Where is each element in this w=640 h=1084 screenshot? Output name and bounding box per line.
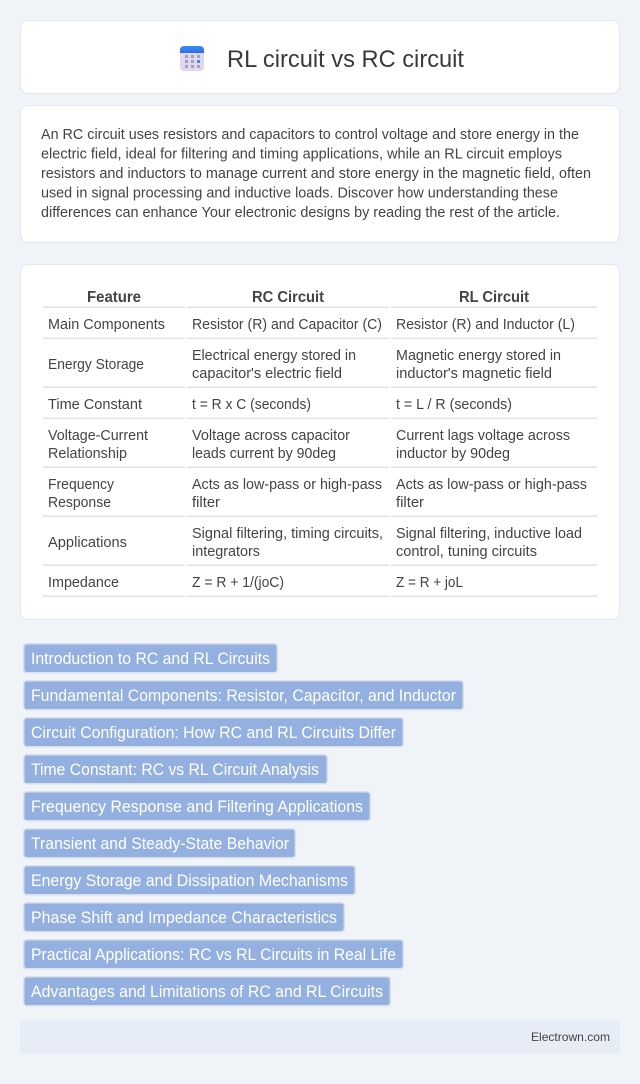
row: voltage-current relationship: Voltage across capacitor — [192, 428, 350, 444]
panel: title header — [20, 20, 620, 94]
link: introduction: Introduction to RC and RL Circuits — [31, 649, 270, 668]
row: energy storage — [48, 348, 561, 382]
link: transient behavior: Transient and Steady-State Behavior — [31, 834, 289, 853]
link: frequency response: Frequency Response and Filtering Applications — [31, 797, 363, 816]
row: voltage-current relationship: Relationship — [48, 446, 127, 462]
row: applications: Applications — [48, 535, 127, 551]
table header row: RL Circuit — [459, 289, 530, 306]
row: time constant: t = R x C (seconds) — [192, 397, 311, 413]
link: energy storage — [24, 866, 355, 895]
row: main components: Main Components — [48, 317, 165, 333]
text block: introduction paragraph: An RC circuit uses resistors and capacitors to control voltage and store energy in the — [41, 127, 579, 143]
text block: introduction paragraph: resistors and inductors to manage current and store energy in the magnetic field, often — [41, 166, 591, 182]
row: main components: Resistor (R) and Inductor (L) — [396, 317, 575, 333]
row: impedance: Z = R + joL — [396, 575, 463, 591]
link: introduction — [24, 644, 277, 673]
row: energy storage: Electrical energy stored in — [192, 348, 356, 364]
table header row: RC Circuit — [252, 289, 325, 306]
row: voltage-current relationship: Voltage-Current — [48, 428, 148, 444]
row: time constant — [48, 397, 512, 413]
row: impedance: Impedance — [48, 575, 119, 591]
row: impedance: Z = R + 1/(joC) — [192, 575, 284, 591]
row: energy storage: capacitor's electric field — [192, 366, 342, 382]
footer — [20, 1020, 620, 1054]
row: main components — [48, 317, 575, 333]
row: time constant: Time Constant — [48, 397, 142, 413]
row: energy storage: Magnetic energy stored in — [396, 348, 561, 364]
row: energy storage: inductor's magnetic field — [396, 366, 552, 382]
row: impedance — [48, 575, 463, 591]
row: frequency response: Frequency — [48, 477, 115, 493]
link: time constant — [24, 755, 327, 784]
row: frequency response: Acts as low-pass or high-pass — [192, 477, 382, 493]
link: fundamental components: Fundamental Components: Resistor, Capacitor, and Inductor — [31, 686, 456, 705]
row: time constant: t = L / R (seconds) — [396, 397, 512, 413]
link: phase shift — [24, 903, 344, 932]
link: time constant: Time Constant: RC vs RL Circuit Analysis — [31, 760, 319, 779]
row: applications: integrators — [192, 544, 260, 560]
row: frequency response: Acts as low-pass or high-pass — [396, 477, 587, 493]
link: fundamental components — [24, 681, 463, 710]
link: circuit configuration: Circuit Configuration: How RC and RL Circuits Differ — [31, 723, 396, 742]
row: frequency response: filter — [192, 495, 220, 511]
link: advantages — [24, 977, 390, 1006]
panel: comparison table — [20, 264, 620, 620]
row: frequency response: filter — [396, 495, 424, 511]
link: transient behavior — [24, 829, 295, 858]
row: voltage-current relationship: inductor by 90deg — [396, 446, 510, 462]
link: practical applications — [24, 940, 403, 969]
row: frequency response: Response — [48, 495, 111, 511]
row: applications — [48, 526, 582, 560]
link: energy storage: Energy Storage and Dissipation Mechanisms — [31, 871, 348, 890]
link: circuit configuration — [24, 718, 403, 747]
link: frequency response — [24, 792, 370, 821]
link: advantages: Advantages and Limitations of RC and RL Circuits — [31, 982, 383, 1001]
table of contents links — [24, 644, 463, 1006]
table header row — [87, 289, 530, 306]
row: applications: Signal filtering, inductive load — [396, 526, 582, 542]
text block: introduction paragraph: differences can enhance Your electronic designs by reading the rest of the article. — [41, 205, 560, 221]
row: frequency response — [48, 477, 587, 511]
table header row: Feature — [87, 289, 141, 306]
text block: introduction paragraph — [41, 127, 591, 221]
row: main components: Resistor (R) and Capacitor (C) — [192, 317, 382, 333]
row: voltage-current relationship — [48, 428, 570, 462]
row: applications: Signal filtering, timing circuits, — [192, 526, 383, 542]
title: RL circuit vs RC circuit — [227, 46, 464, 73]
footer: Electrown.com — [531, 1030, 610, 1044]
link: phase shift: Phase Shift and Impedance Characteristics — [31, 908, 337, 927]
text block: introduction paragraph: electric field, ideal for filtering and timing applications, while an RL circuit employs — [41, 146, 562, 162]
panel: introduction — [20, 106, 620, 242]
row: energy storage: Energy Storage — [48, 357, 144, 373]
row: applications: control, tuning circuits — [396, 544, 537, 560]
icon: calendar — [180, 46, 204, 71]
link: practical applications: Practical Applications: RC vs RL Circuits in Real Life — [31, 945, 396, 964]
row: voltage-current relationship: Current lags voltage across — [396, 428, 570, 444]
row: voltage-current relationship: leads current by 90deg — [192, 446, 336, 462]
text block: introduction paragraph: used in signal processing and inductive loads. Discover how understanding these — [41, 186, 558, 202]
